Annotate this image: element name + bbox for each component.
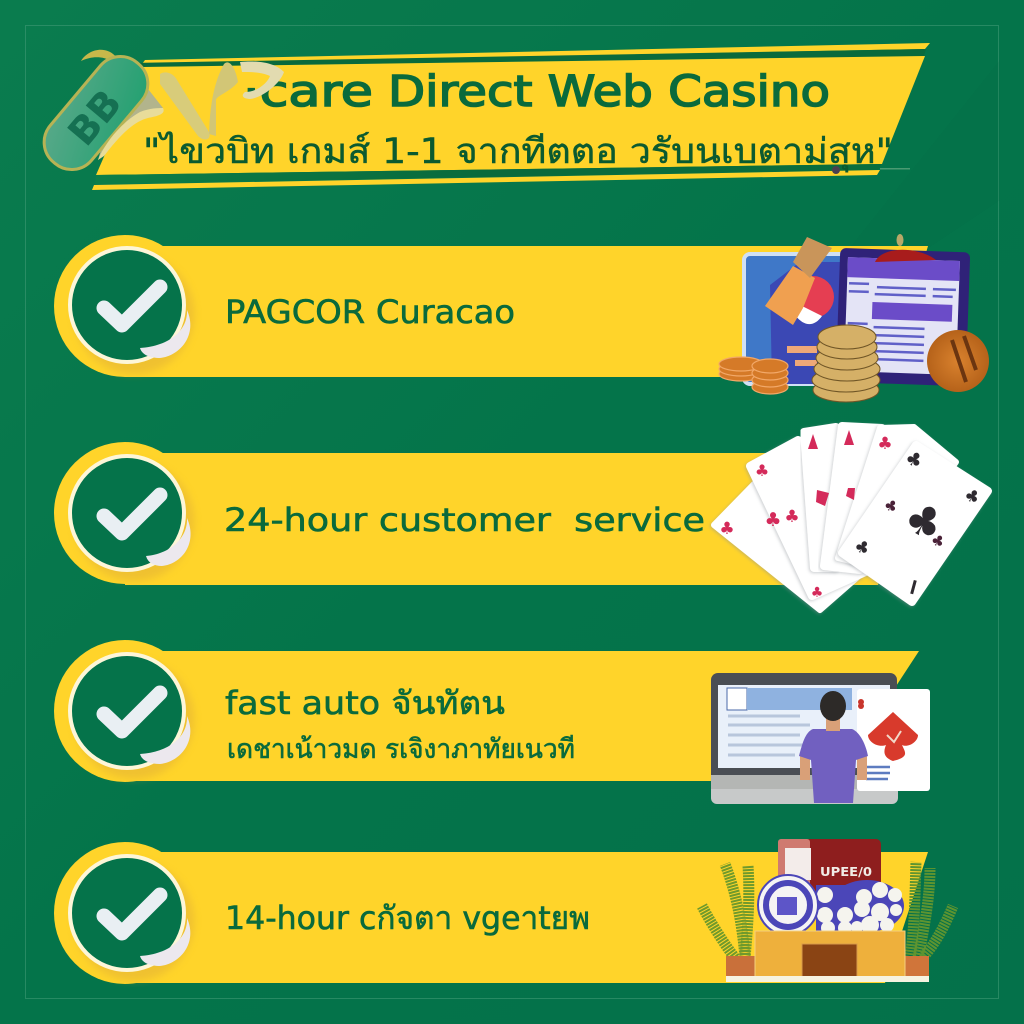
illustration: fan of playing cards: ♣ (901, 446, 927, 474)
illustration: fan of playing cards: ♣ (755, 461, 769, 480)
row label: 24-hour customer service (224, 501, 705, 539)
illustration: fan of playing cards: ♣ (784, 507, 800, 527)
banner bottom strip (95, 164, 882, 184)
check badge (54, 442, 196, 584)
row label lines: fast auto จันทัตน (225, 684, 505, 722)
illustration: person at laptop with card (711, 673, 930, 804)
thai subtitle: "ไขวบิท เกมส์ 1-1 จากทีตตอ วรับนเบตาม่สุห" (143, 131, 893, 172)
check badge (54, 640, 196, 782)
title banner (34, 43, 930, 190)
row label: PAGCOR Curacao (225, 293, 515, 331)
illustration: fan of playing cards: ♣ (960, 485, 984, 509)
illustration: fan of playing cards: ♣ (877, 434, 893, 454)
row bar (125, 453, 920, 585)
icon: torn corner emblem: BB (59, 81, 130, 154)
title text: ·care (243, 67, 373, 117)
row 4: 14-hour (54, 839, 953, 984)
check badge (54, 842, 196, 984)
illustration: fan of playing cards: ♣ (896, 491, 953, 552)
illustration: fan of playing cards: ♣ (850, 536, 874, 560)
illustration: tablets and coins (719, 234, 989, 402)
left plant (702, 864, 749, 958)
illustration: fan of playing cards: ♣ (764, 509, 782, 531)
row label: 14-hour cกัจตา vgeาtยพ (225, 899, 590, 937)
banner top strip (142, 43, 930, 64)
row label lines (225, 684, 575, 765)
illustration: fan of playing cards: ♣ (719, 519, 735, 539)
illustration: fan of playing cards: ♣ (881, 495, 901, 517)
illustration: fan of playing cards: ♣ (928, 530, 948, 552)
title text: Direct Web Casino (388, 67, 830, 117)
illustration: fan of playing cards: ♣ (811, 585, 823, 601)
illustration: fan of playing cards (714, 426, 988, 610)
row 1: PAGCOR Curacao (54, 234, 989, 402)
row bar (125, 852, 928, 983)
title text (243, 67, 830, 117)
row 3: fast auto (54, 640, 930, 804)
illustration: chips, card and plants in box (702, 839, 953, 982)
row bar (125, 246, 928, 377)
row 2: 24-hour customer service (54, 426, 988, 610)
row bar (125, 651, 919, 781)
icon: torn corner emblem (34, 46, 284, 180)
banner main panel (96, 56, 925, 175)
row label lines: เดชาเน้าวมด รเจิงาภาทัยเนวที (227, 734, 575, 765)
illustration: chips, card and plants in box: UPEE/0 (820, 865, 872, 879)
right plant (910, 862, 953, 958)
check badge (54, 235, 196, 377)
